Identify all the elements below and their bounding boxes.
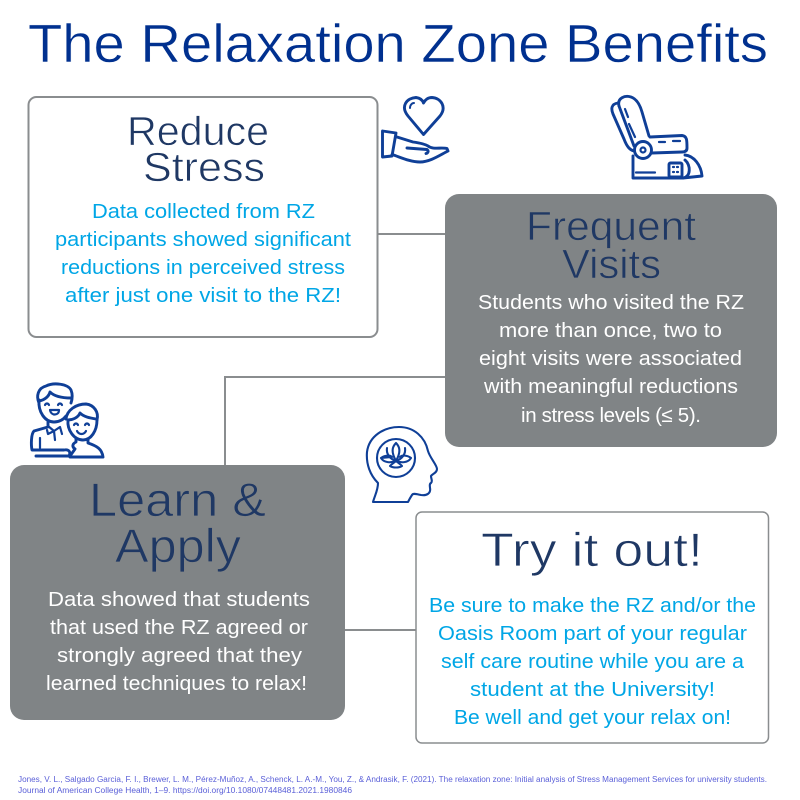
heading: frequent visits (526, 203, 697, 287)
connector: learn and apply to try it out (345, 629, 416, 631)
body text: try it out: student at the University! (470, 678, 715, 701)
heading: learn and apply (89, 473, 266, 572)
heading: learn and apply: Learn & (89, 473, 266, 526)
icon: hand holding heart (382, 98, 448, 162)
body text: try it out (429, 594, 756, 729)
body text: reduce stress: reductions in perceived stress (61, 256, 345, 279)
panel: learn and apply (10, 465, 345, 720)
body text: reduce stress: Data collected from RZ (92, 200, 315, 223)
heading: reduce stress: Stress (143, 144, 265, 190)
citation (18, 775, 767, 795)
heading: reduce stress: Reduce (127, 108, 269, 154)
panel: frequent visits (445, 194, 777, 447)
body text: frequent visits (478, 291, 744, 427)
connector: reduce stress to frequent visits (378, 233, 445, 235)
body text: try it out: Be well and get your relax on! (454, 706, 731, 729)
body text: try it out: Oasis Room part of your regular (438, 622, 747, 645)
body text: frequent visits: eight visits were associated (479, 347, 742, 370)
body text: try it out: Be sure to make the RZ and/or the (429, 594, 756, 617)
panel background (10, 465, 345, 720)
body text: try it out: self care routine while you are a (441, 650, 745, 673)
heading: learn and apply: Apply (115, 519, 242, 572)
icon: head with lotus (367, 427, 437, 502)
icon: two smiling people (31, 384, 103, 457)
icon: massage chair (612, 96, 702, 178)
body text: learn and apply: Data showed that students (48, 588, 310, 611)
citation: Journal of American College Health, 1–9. https://doi.org/10.1080/07448481.2021.1980846 (18, 786, 353, 795)
citation: Jones, V. L., Salgado Garcia, F. I., Brewer, L. M., Pérez-Muñoz, A., Schenck, L. A.-M., You, Z., & Andrasik, F. (2021). The relaxation zone: Initial analysis of Stress Management Services for university students. (18, 775, 767, 784)
body text: frequent visits: more than once, two to (499, 319, 722, 342)
body text: reduce stress: after just one visit to the RZ! (65, 284, 341, 307)
panel background (445, 194, 777, 447)
body text: frequent visits: with meaningful reductions (483, 375, 738, 398)
panel background (28, 97, 378, 337)
title: The Relaxation Zone Benefits (28, 14, 768, 74)
body text: reduce stress (55, 200, 351, 307)
body text: learn and apply (46, 588, 310, 695)
body text: reduce stress: participants showed significant (55, 228, 351, 251)
panel: reduce stress (28, 97, 378, 337)
heading: frequent visits: Frequent (526, 203, 697, 249)
body text: frequent visits: in stress levels (≤ 5). (521, 404, 701, 427)
body text: learn and apply: strongly agreed that they (57, 644, 303, 667)
panel background (416, 512, 768, 743)
body text: frequent visits: Students who visited the RZ (478, 291, 744, 314)
heading: frequent visits: Visits (562, 241, 661, 287)
body text: learn and apply: learned techniques to relax! (46, 672, 307, 695)
heading: reduce stress (127, 108, 269, 190)
panel: try it out (416, 512, 768, 743)
connector: frequent visits to learn and apply (225, 377, 445, 465)
heading: try it out: Try it out! (481, 523, 703, 576)
body text: learn and apply: that used the RZ agreed or (50, 616, 308, 639)
